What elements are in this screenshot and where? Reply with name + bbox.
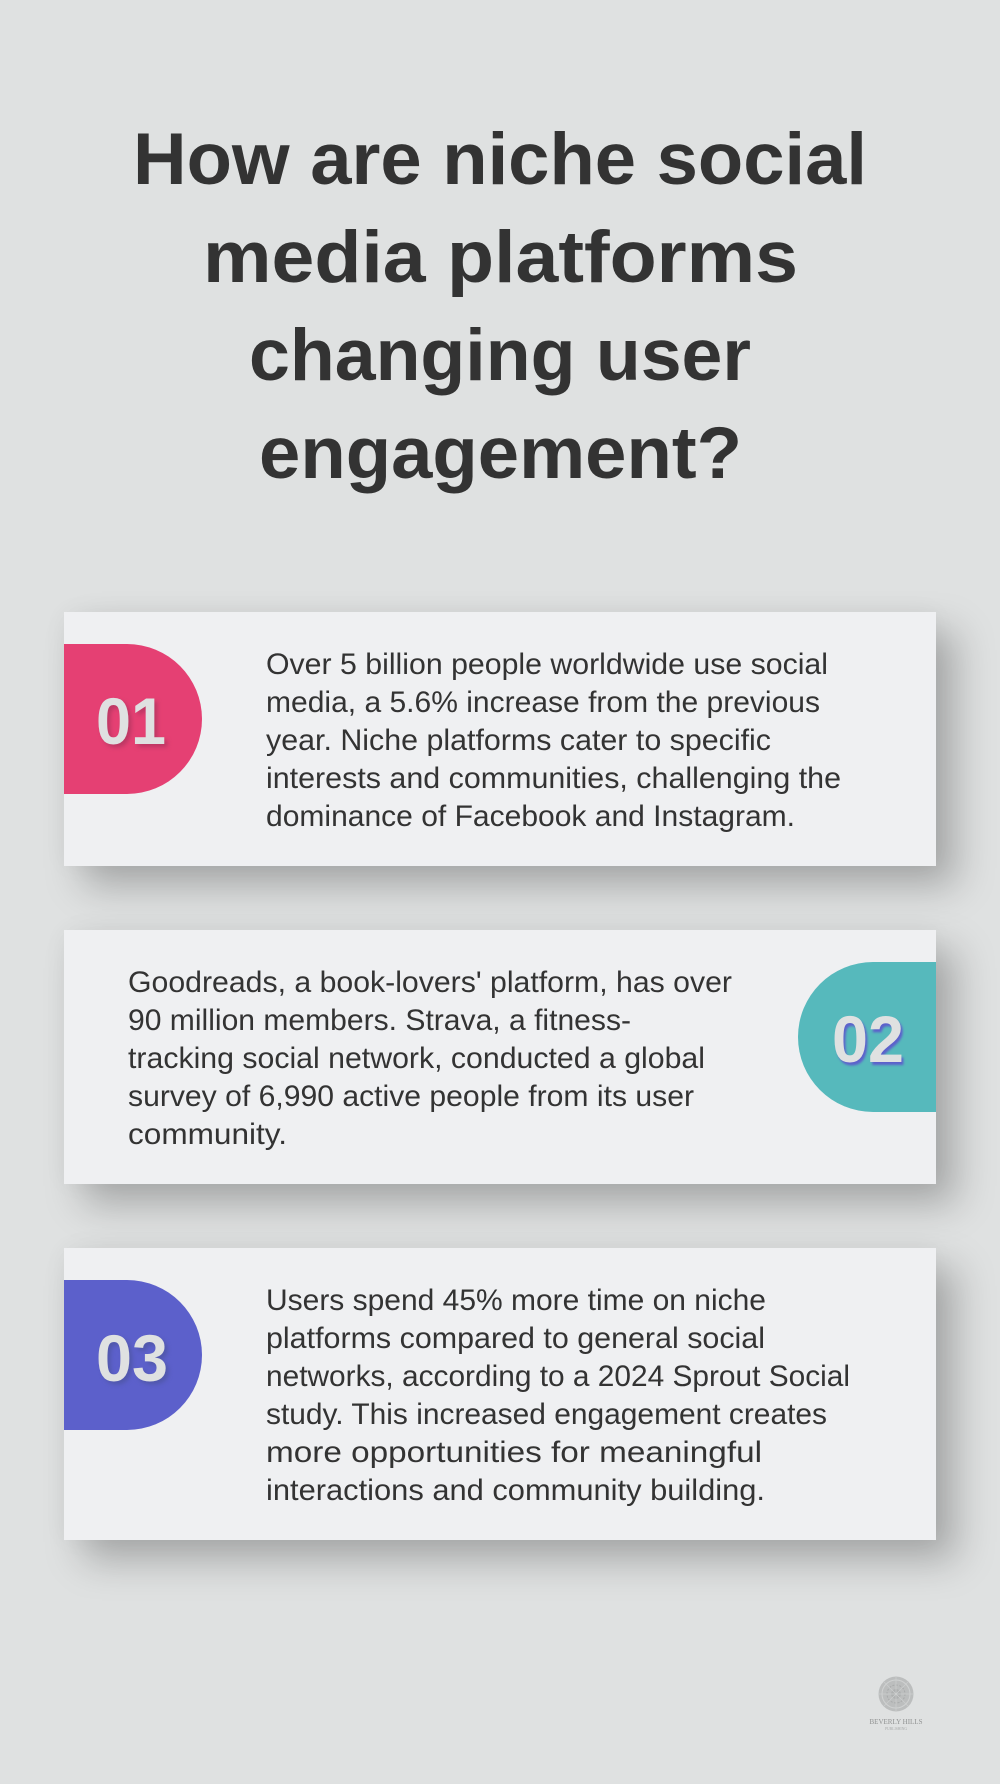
text block: card 03: more opportunities for meaningful xyxy=(266,1436,762,1469)
logo wordmark xyxy=(870,1718,923,1731)
text block: card 01: year. Niche platforms cater to specific xyxy=(266,724,771,757)
text block: card 03: networks, according to a 2024 Sprout Social xyxy=(266,1360,850,1393)
text block: card 03: platforms compared to general social xyxy=(266,1322,765,1355)
text block: card 02: survey of 6,990 active people from its user xyxy=(128,1080,694,1113)
text block: card 01: dominance of Facebook and Instagram. xyxy=(266,800,795,833)
logo: Beverly Hills Publishing xyxy=(870,1676,923,1731)
title: engagement? xyxy=(259,413,742,494)
badge: 02 xyxy=(798,962,936,1112)
text block: card 02 xyxy=(128,966,732,1151)
badge: 01 xyxy=(64,644,202,794)
text block: card 03: Users spend 45% more time on niche xyxy=(266,1284,766,1317)
logo wordmark: PUBLISHING xyxy=(885,1726,907,1731)
panel: card 02 xyxy=(64,930,936,1184)
text block: card 01 xyxy=(266,648,841,833)
logo wordmark: BEVERLY HILLS xyxy=(870,1718,923,1726)
badge: 03: 03 xyxy=(96,1321,168,1395)
icon: logo medallion xyxy=(878,1676,914,1712)
badge: 03 xyxy=(64,1280,202,1430)
panel: card 03 xyxy=(64,1248,936,1540)
text block: card 01: Over 5 billion people worldwide use social xyxy=(266,648,828,681)
badge: 02: 02 xyxy=(832,1002,904,1076)
title: changing user xyxy=(249,315,751,396)
text block: card 03 xyxy=(266,1284,850,1507)
text block: card 02: tracking social network, conducted a global xyxy=(128,1042,705,1075)
panel: card 01 xyxy=(64,612,936,866)
text block: card 02: community. xyxy=(128,1118,287,1151)
title: How are niche social xyxy=(133,119,867,200)
text block: card 02: 90 million members. Strava, a fitness- xyxy=(128,1004,631,1037)
text block: card 03: study. This increased engagement creates xyxy=(266,1398,827,1431)
title: media platforms xyxy=(203,217,798,298)
text block: card 02: Goodreads, a book-lovers' platform, has over xyxy=(128,966,732,999)
text block: card 03: interactions and community building. xyxy=(266,1474,765,1507)
title xyxy=(133,119,867,494)
text block: card 01: interests and communities, challenging the xyxy=(266,762,841,795)
badge: 01: 01 xyxy=(96,684,166,758)
text block: card 01: media, a 5.6% increase from the previous xyxy=(266,686,820,719)
